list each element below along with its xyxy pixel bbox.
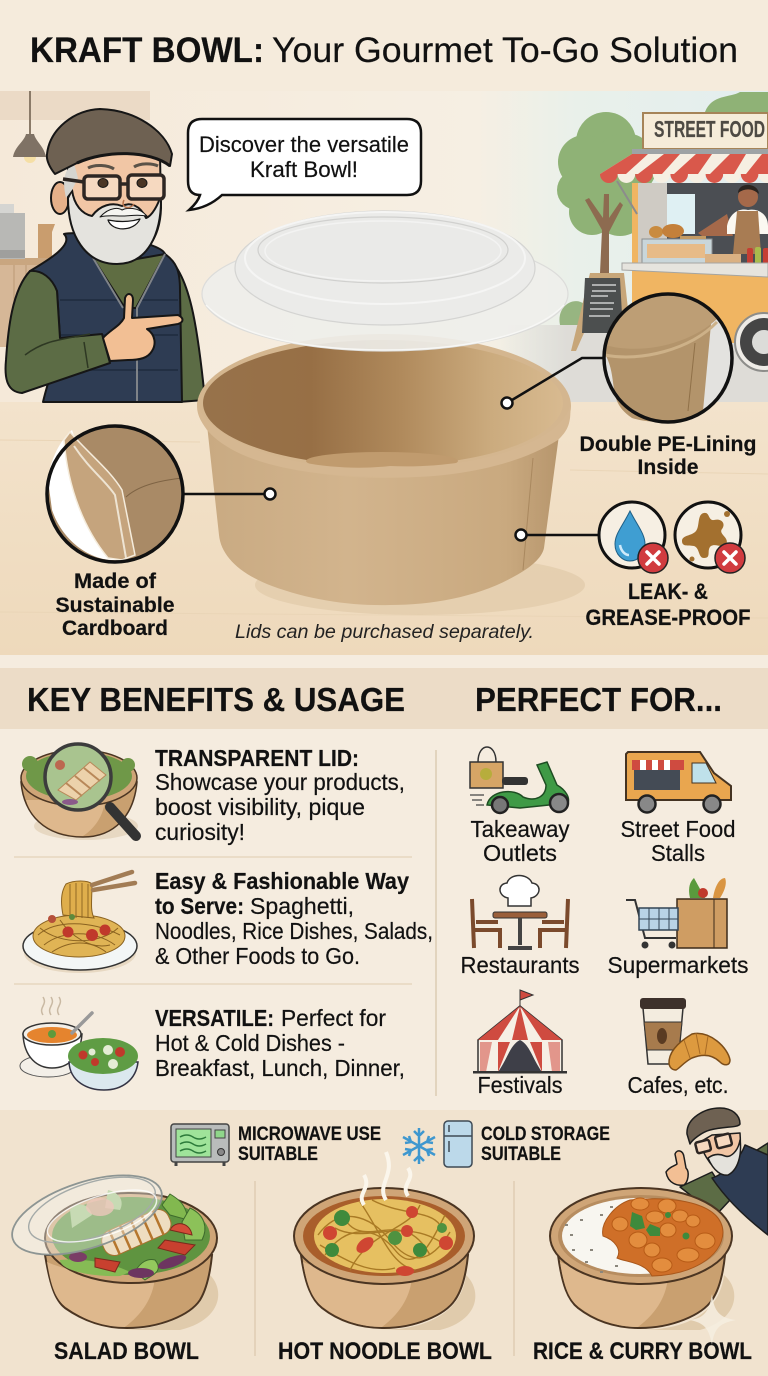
scene background [0, 91, 768, 656]
lid note: Lids can be purchased separately. [235, 622, 534, 643]
item: street food stalls [620, 752, 736, 866]
icon: snowflake and fridge [403, 1121, 472, 1167]
item: cafes: Cafes, etc. [628, 1072, 728, 1098]
benefit text: serving: Spaghetti, [250, 893, 354, 919]
benefit text: serving: & Other Foods to Go. [155, 943, 360, 969]
benefit text: transparent lid: boost visibility, pique [155, 794, 365, 820]
callout: PE lining: Double PE-Lining [580, 433, 756, 456]
callout: PE lining [502, 294, 756, 479]
cold storage label: COLD STORAGE [481, 1124, 610, 1145]
callout: sustainable cardboard [47, 426, 276, 640]
title: Your Gourmet To-Go Solution [272, 31, 738, 70]
item: cafes [628, 998, 730, 1098]
benefit text: transparent lid [155, 745, 405, 845]
kraft bowl photo [197, 334, 585, 615]
benefit text: versatile: VERSATILE: [155, 1005, 274, 1031]
street food truck scene [557, 92, 768, 371]
presenter thumbs up [666, 1108, 768, 1235]
hot noodle bowl [294, 1152, 475, 1330]
salad bowl [3, 1160, 218, 1330]
callout: leak and grease proof: LEAK- & [628, 579, 708, 604]
icon: microwave [171, 1124, 229, 1166]
benefit text: transparent lid: curiosity! [155, 819, 245, 845]
section headers [0, 668, 768, 729]
benefit text: versatile: Breakfast, Lunch, Dinner, [155, 1055, 405, 1081]
panel: key benefits [14, 744, 433, 1090]
item: festivals: Festivals [478, 1072, 562, 1098]
callout: sustainable cardboard: Cardboard [62, 617, 168, 640]
benefit text: transparent lid: Showcase your products, [155, 769, 405, 795]
title [0, 0, 768, 91]
callout: leak and grease proof [516, 502, 750, 630]
transparent lid [202, 211, 568, 351]
speech bubble: Discover the versatile [199, 132, 409, 157]
callout: PE lining: Inside [638, 456, 698, 479]
benefit text: versatile [155, 1005, 405, 1081]
cold storage label: SUITABLE [481, 1144, 561, 1165]
presenter character [6, 109, 205, 402]
icon: spaghetti plate [23, 872, 137, 973]
panel: bowl varieties [0, 1108, 768, 1376]
sparkle watermark [690, 1294, 736, 1345]
callout: sustainable cardboard: Made of [74, 570, 157, 593]
item: festivals [473, 990, 567, 1098]
callout: sustainable cardboard: Sustainable [56, 594, 174, 617]
benefit text: transparent lid: TRANSPARENT LID: [155, 745, 359, 771]
salad bowl label: SALAD BOWL [54, 1338, 199, 1365]
cafe background [0, 91, 70, 347]
item: street food stalls: Street Food [620, 816, 736, 842]
microwave label: MICROWAVE USE [238, 1124, 381, 1145]
benefit: transparent lid [21, 744, 405, 845]
section headers: PERFECT FOR... [475, 681, 722, 718]
speech bubble: Kraft Bowl! [250, 157, 358, 182]
microwave label [238, 1124, 381, 1165]
item: takeaway outlets: Outlets [483, 840, 557, 866]
benefit: serving [23, 868, 433, 973]
item: restaurants [460, 876, 580, 978]
item: street food stalls: Stalls [651, 840, 705, 866]
panel: hero product scene [0, 91, 768, 656]
rice and curry bowl [550, 1188, 734, 1330]
speech bubble [188, 119, 421, 210]
hot noodle bowl label: HOT NOODLE BOWL [278, 1338, 492, 1365]
benefit text: serving: Noodles, Rice Dishes, Salads, [155, 918, 433, 944]
item: supermarkets: Supermarkets [608, 952, 748, 978]
benefit: versatile [20, 997, 405, 1090]
section headers: KEY BENEFITS & USAGE [27, 681, 405, 718]
item: takeaway outlets: Takeaway [470, 816, 570, 842]
benefit text: serving: Easy & Fashionable Way [155, 868, 409, 894]
benefit text: versatile: Perfect for [281, 1005, 386, 1031]
microwave label: SUITABLE [238, 1144, 318, 1165]
benefit text: versatile: Hot & Cold Dishes - [155, 1030, 345, 1056]
benefit text: serving: to Serve: [155, 893, 244, 919]
title: KRAFT BOWL: [30, 31, 264, 70]
icon: bowl under magnifier [21, 744, 138, 840]
panel: perfect for [460, 747, 748, 1098]
item: takeaway outlets [470, 747, 570, 866]
item: restaurants: Restaurants [460, 952, 580, 978]
icon: soup and salad [20, 997, 138, 1090]
item: supermarkets [608, 878, 748, 978]
cold storage label [481, 1124, 610, 1165]
benefit text: serving [155, 868, 433, 969]
callout: leak and grease proof: GREASE-PROOF [586, 605, 750, 630]
